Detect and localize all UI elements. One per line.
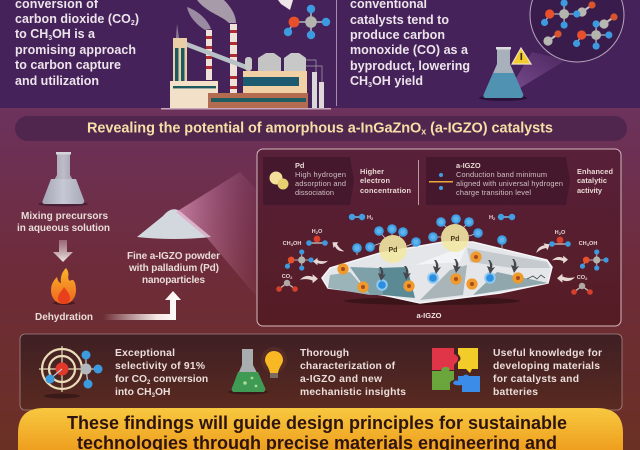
label: higher electron concentration: electron [360,176,390,185]
text: CO2 conversion promise: 2 [131,20,135,27]
label: enhanced catalytic activity: catalytic [577,176,607,185]
hydrogen atoms: 2 [371,216,374,221]
text: conventional catalysts: produce carbon [350,28,445,42]
light beam [510,52,566,88]
text: characterization: characterization of [300,361,396,372]
text: CO2 conversion promise: 3 [48,35,52,42]
icon: flame [51,268,76,305]
text: conventional catalysts [350,0,470,89]
text: CO2 conversion promise: to CH [15,27,48,41]
box: Pd: Pd [295,161,305,170]
conclusion banner [18,408,623,450]
right molecules: O [561,230,566,236]
a-IGZO rock [322,242,552,305]
label: powder: Fine a-IGZO powder [127,251,220,262]
text: characterization: Thorough [300,348,349,359]
label: powder: nanoparticles [142,275,205,286]
hydrogen atoms: 2 [493,216,496,221]
left molecules: OH [293,241,301,247]
text: useful knowledge: for catalysts and [493,374,579,385]
text: selectivity: OH [155,387,170,398]
box: Pd [263,157,354,205]
text: selectivity: for CO [115,374,147,385]
label: mixing precursors: Mixing precursors [21,211,108,222]
text: selectivity: Exceptional [115,348,175,359]
divider [336,0,337,106]
box: Pd: High hydrogen [295,170,346,179]
text: conventional catalysts: CH [350,74,368,88]
label: higher electron concentration: concentration [360,186,411,195]
panel: key results [20,334,622,410]
left molecules: 2 [316,230,319,235]
text: CO2 conversion promise: promising approach [15,43,136,57]
arrow: down [53,240,73,262]
box: a-IGZO [418,157,570,205]
right molecules: 2 [585,276,588,281]
heading band: (a-IGZO) catalysts [426,120,553,136]
left molecules: CH [283,241,291,247]
label: mixing precursors: in aqueous solution [17,223,110,234]
text: CO2 conversion promise: and utilization [15,74,99,88]
text: CO2 conversion promise: ) [135,12,139,26]
text: selectivity: into CH [115,387,152,398]
conclusion banner: These findings will guide design principles for sustainable [67,413,567,433]
icon: powder [137,209,211,239]
icon: flask with warning [479,47,531,101]
left molecules: 3 [291,242,294,247]
label: enhanced catalytic activity: activity [577,186,603,195]
right molecules: OH [589,241,597,247]
heading band: Revealing the potential of amorphous a-InGaZnO [87,120,421,136]
panel: catalyst mechanism [257,149,621,326]
hydrogen atoms: H [489,215,493,221]
Pd particles: Pd [389,247,397,254]
left molecules [276,229,346,292]
text: useful knowledge: batteries [493,387,538,398]
icon: green flask and bulb [228,347,287,394]
text: CO2 conversion promise [15,0,139,88]
right molecules: CH [579,241,587,247]
process: flask [38,152,88,206]
label: a-IGZO: a-IGZO [416,311,442,320]
arrow: to molecule [278,0,293,10]
icon: methanol molecule top [284,5,330,39]
text: conventional catalysts: 3 [368,82,372,89]
text: conventional catalysts: monoxide (CO) as a [350,43,469,57]
icon: factory [161,0,331,110]
right molecules: 3 [587,242,590,247]
text: useful knowledge: developing materials [493,361,600,372]
box: a-IGZO: aligned with universal hydrogen [456,179,563,188]
text: CO2 conversion promise: carbon dioxide (CO [15,12,131,26]
text: conventional catalysts: catalysts tend to [350,13,449,27]
icon: puzzle [432,348,480,392]
text: selectivity: conversion [150,374,208,385]
label: dehydration: Dehydration [35,312,93,323]
box: Pd: adsorption and [295,179,346,188]
left molecules: O [318,229,323,235]
electrons and charges [337,251,545,293]
left molecules: H [312,229,316,235]
icon: target with molecule [39,346,102,398]
text: characterization: mechanistic insights [300,387,406,398]
light cone to panel [176,172,257,297]
right molecules: 2 [559,231,562,236]
label: higher electron concentration: Higher [360,167,384,176]
Pd particles [379,224,469,263]
text: characterization: a-IGZO and new [300,374,383,385]
Pd particles: Pd [451,236,459,243]
text: conventional catalysts: OH yield [372,74,423,88]
text: selectivity: 3 [152,393,156,399]
text: CO2 conversion promise: OH is a [52,27,96,41]
left molecules: CO [282,274,290,280]
heading band: x [421,126,426,136]
label: enhanced catalytic activity: Enhanced [577,167,613,176]
hydrogen atoms [349,214,515,255]
right molecules: H [555,230,559,236]
box: a-IGZO: a-IGZO [456,161,481,170]
label: powder: with palladium (Pd) [128,263,219,274]
box: a-IGZO: Conduction band minimum [456,170,547,179]
top band [0,0,640,108]
text: selectivity: 2 [147,380,151,386]
text: selectivity: selectivity of 91% [115,361,205,372]
text: conventional catalysts: byproduct, lowering [350,59,470,73]
left molecules: 2 [290,275,293,280]
hydrogen atoms: H [367,215,371,221]
arrow: dehydration to powder [103,291,181,320]
heading band [15,116,627,141]
right molecules [534,230,609,295]
box: a-IGZO: charge transition level [456,188,531,197]
right molecules: CO [577,275,585,281]
magnified molecules circle [530,0,624,62]
text: CO2 conversion promise: to carbon capture [15,58,121,72]
text: useful knowledge: Useful knowledge for [493,348,602,359]
box: Pd: dissociation [295,188,334,197]
